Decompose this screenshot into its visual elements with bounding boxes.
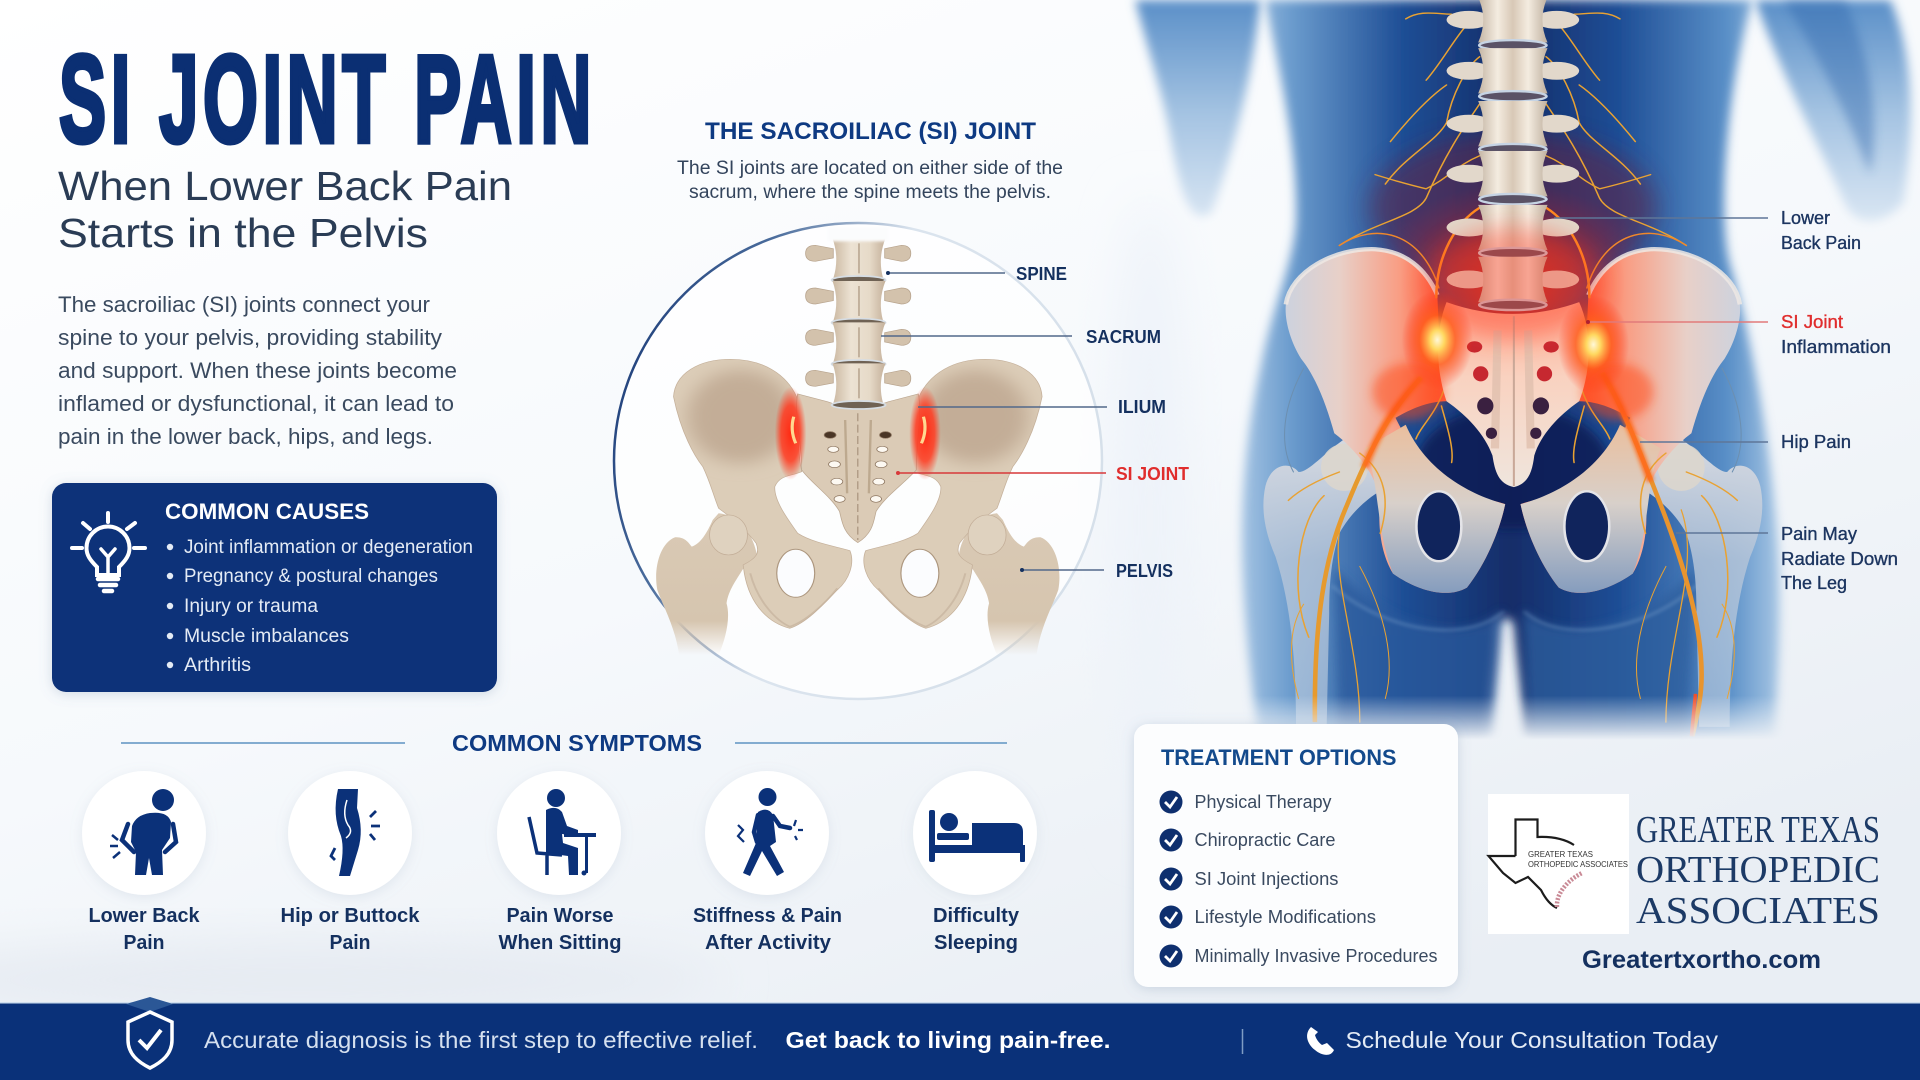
hip bones [1263, 249, 1505, 727]
body x-ray illustration [1135, 0, 1911, 740]
treatment checklist: SI Joint Injections [1194, 869, 1338, 889]
causes list: Arthritis [184, 655, 251, 676]
callout: radiating leg pain: Radiate Down [1781, 549, 1898, 569]
treatment checklist [1160, 790, 1438, 968]
logo: Texas emblem [1488, 794, 1629, 934]
label: Difficulty [933, 904, 1020, 927]
label: Pain Worse [506, 904, 614, 927]
treatment checklist: Minimally Invasive Procedures [1194, 946, 1438, 966]
logo: Texas emblem: ORTHOPEDIC ASSOCIATES [1528, 860, 1628, 869]
causes heading: COMMON CAUSES [165, 499, 369, 524]
callout: lower back pain [1554, 208, 1861, 253]
dark pelvic cavity [1416, 406, 1610, 529]
callout: si joint inflammation: SI Joint [1781, 312, 1843, 332]
callout: pelvis: PELVIS [1116, 561, 1173, 581]
red haze [1370, 132, 1656, 283]
treatment checklist: Lifestyle Modifications [1194, 907, 1376, 927]
logo: company name: ORTHOPEDIC [1636, 849, 1880, 891]
subtitle: When Lower Back Pain [58, 163, 512, 209]
intro paragraph: inflamed or dysfunctional, it can lead to [58, 391, 454, 416]
spine [1447, 0, 1579, 51]
consultation prompt: Schedule Your Consultation Today [1346, 1027, 1719, 1053]
callout: lower back pain: Lower [1781, 208, 1830, 228]
treatment checklist: Physical Therapy [1194, 792, 1332, 812]
treatment checklist: Chiropractic Care [1194, 830, 1336, 850]
subtitle: Starts in the Pelvis [58, 210, 428, 256]
causes list: Muscle imbalances [184, 626, 349, 647]
title: SI JOINT PAIN [59, 31, 596, 169]
torso and legs silhouette [1242, 0, 1779, 740]
label: Pain [330, 931, 370, 954]
icon: bed [929, 810, 1025, 862]
callout: pelvis [1020, 561, 1173, 581]
intro paragraph: The sacroiliac (SI) joints connect your [58, 292, 430, 317]
nerves [1285, 13, 1480, 722]
label [498, 904, 622, 954]
treatment heading: TREATMENT OPTIONS [1161, 745, 1396, 770]
intro paragraph: and support. When these joints become [58, 358, 457, 383]
callout: si joint: SI JOINT [1116, 464, 1189, 484]
callout: spine: SPINE [1016, 264, 1067, 284]
callouts: pain locations [1554, 208, 1898, 593]
icon: shield [126, 997, 173, 1068]
callout: radiating leg pain [1676, 524, 1898, 593]
website: Greatertxortho.com [1582, 946, 1821, 974]
causes list: Injury or trauma [184, 596, 318, 617]
callout: si joint inflammation: Inflammation [1781, 337, 1891, 357]
callout: radiating leg pain: The Leg [1781, 573, 1847, 593]
causes list [167, 537, 473, 676]
callout: lower back pain: Back Pain [1781, 233, 1861, 253]
sacroiliac section heading: THE SACROILIAC (SI) JOINT [705, 118, 1036, 145]
sacrum [1438, 302, 1589, 487]
label: When Sitting [498, 931, 622, 954]
label: Lower Back [88, 904, 200, 927]
causes list: Pregnancy & postural changes [184, 566, 438, 587]
footer banner [0, 997, 1920, 1080]
symptom: hip or buttock pain [280, 771, 420, 954]
pelvis skeleton illustration [656, 227, 1059, 655]
panel: common causes [52, 483, 497, 692]
label [280, 904, 420, 954]
label: Hip or Buttock [280, 904, 420, 927]
symptom: pain worse when sitting [497, 771, 622, 954]
logo: company name: ASSOCIATES [1636, 890, 1880, 932]
icon: light bulb [72, 513, 145, 591]
label [933, 904, 1020, 954]
icon: phone [1307, 1027, 1334, 1055]
icon: seated person at desk [529, 789, 596, 876]
icon: hip side view [331, 789, 380, 876]
sciatic nerves [1315, 378, 1421, 722]
callout: radiating leg pain: Pain May [1781, 524, 1857, 544]
intro paragraph: spine to your pelvis, providing stability [58, 325, 442, 350]
footer message: Accurate diagnosis is the first step to effective relief. [204, 1027, 758, 1053]
sacroiliac description: sacrum, where the spine meets the pelvis. [689, 182, 1051, 203]
sacroiliac description [677, 158, 1063, 203]
causes list: Joint inflammation or degeneration [184, 537, 473, 558]
inflammation hot spots [1402, 290, 1473, 389]
intro paragraph: pain in the lower back, hips, and legs. [58, 424, 433, 449]
logo: Texas emblem: GREATER TEXAS [1528, 850, 1593, 859]
symptom: stiffness and pain after activity [693, 771, 842, 954]
label: Sleeping [934, 931, 1018, 954]
callout: si joint inflammation [1586, 312, 1891, 357]
intro paragraph [58, 292, 457, 449]
panel: treatment options [1134, 724, 1458, 987]
label: Stiffness & Pain [693, 904, 842, 927]
arms [1135, 0, 1911, 221]
logo: company name [1636, 809, 1880, 932]
label [88, 904, 200, 954]
sacroiliac description: The SI joints are located on either side of the [677, 158, 1063, 179]
callout: hip pain: Hip Pain [1781, 432, 1851, 452]
icon: walking person [738, 788, 803, 876]
label: Pain [124, 931, 164, 954]
callout: si joint [896, 464, 1189, 484]
label: After Activity [705, 931, 832, 954]
subtitle [58, 163, 512, 256]
callouts: pelvis anatomy labels [881, 264, 1189, 581]
icon: person holding lower back [110, 789, 176, 875]
glutes shading [1334, 566, 1503, 740]
circular frame [614, 223, 1102, 699]
common symptoms heading: COMMON SYMPTOMS [452, 730, 702, 756]
symptom: difficulty sleeping [910, 771, 1040, 954]
label [693, 904, 842, 954]
callout: ilium: ILIUM [1118, 397, 1166, 417]
callout: spine [886, 264, 1067, 284]
symptom: lower back pain [82, 771, 206, 954]
callout: sacrum: SACRUM [1086, 327, 1161, 347]
footer call to action: Get back to living pain-free. [786, 1027, 1110, 1053]
red glow over lower spine [1426, 227, 1600, 340]
